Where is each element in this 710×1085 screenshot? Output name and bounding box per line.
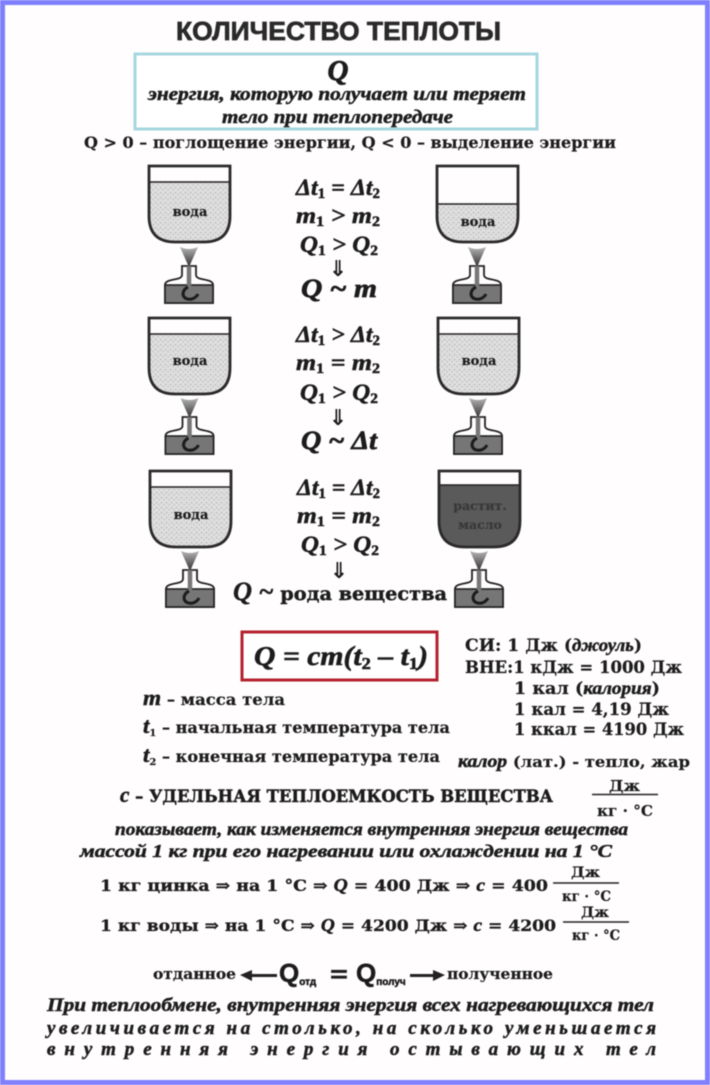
definition box: тело при теплопередаче bbox=[222, 108, 453, 128]
row 2: relations: ⇓ bbox=[329, 406, 347, 431]
units block: 1 кал (калория ) bbox=[514, 678, 660, 698]
variable legend: t bbox=[143, 742, 150, 767]
heat balance equation: отданное bbox=[153, 966, 236, 983]
variable legend: t bbox=[143, 713, 150, 738]
specific heat heading: с – УДЕЛЬНАЯ ТЕПЛОЕМКОСТЬ ВЕЩЕСТВА bbox=[120, 782, 553, 807]
row 1: relations: Q ~ m bbox=[301, 274, 377, 303]
row 2: relations: > Δt bbox=[325, 322, 373, 347]
units block: 1 кал = 4,19 Дж bbox=[514, 700, 669, 719]
row 3: relations bbox=[233, 475, 447, 606]
row 1: relations: = Δt bbox=[325, 175, 373, 200]
specific heat heading: кг · °С bbox=[597, 802, 653, 820]
variable legend: m – масса тела bbox=[143, 685, 285, 710]
row 3: relations: 1 bbox=[317, 514, 325, 530]
row 2: left vessel with lamp bbox=[149, 318, 230, 454]
definition box bbox=[135, 54, 537, 129]
closing statement: внутренняя энергия остывающих тел bbox=[47, 1039, 656, 1060]
main formula box: – t bbox=[371, 641, 411, 671]
variable legend: 1 bbox=[149, 728, 156, 739]
definition box: Q bbox=[328, 55, 349, 87]
zinc example: Дж bbox=[571, 865, 600, 881]
closing statement bbox=[45, 995, 656, 1060]
units block: ВНЕ:1 кДж = 1000 Дж bbox=[465, 658, 682, 677]
main formula box: 2 bbox=[362, 654, 371, 673]
closing statement: При теплообмене, внутренняя энергия всех нагревающихся тел bbox=[46, 995, 654, 1016]
variable legend: – начальная температура тела bbox=[156, 718, 450, 737]
main formula box: ) bbox=[415, 641, 428, 671]
row 1: relations: m bbox=[296, 203, 314, 228]
row 1: right vessel with lamp bbox=[437, 166, 518, 303]
specific heat description: показывает, как изменяется внутренняя энергия вещества bbox=[115, 819, 628, 839]
heat balance equation: полученное bbox=[447, 966, 553, 983]
variable legend: 2 bbox=[149, 757, 156, 768]
row 1: relations bbox=[295, 175, 380, 303]
row 3: relations: 2 bbox=[371, 543, 379, 559]
water example: кг · °С bbox=[572, 928, 620, 944]
row 2: relations: Q bbox=[300, 380, 317, 405]
row 3: relations: > Q bbox=[327, 532, 371, 557]
row 3: relations: = Δt bbox=[326, 475, 373, 500]
row 3: left vessel with lamp bbox=[150, 471, 231, 607]
row 3: right vessel with oil and lamp bbox=[439, 471, 520, 607]
zinc example bbox=[100, 865, 619, 905]
closing statement: увеличивается на столько, на сколько уменьшается bbox=[45, 1018, 656, 1039]
row 2: right vessel with lamp bbox=[438, 318, 519, 454]
row 1: relations: 1 bbox=[316, 214, 324, 230]
units block: 1 ккал = 4190 Дж bbox=[514, 720, 684, 739]
row 3: relations: = m bbox=[325, 503, 372, 528]
row 3: relations: 2 bbox=[372, 514, 380, 530]
row 1: relations: > Q bbox=[326, 232, 370, 257]
main formula box: 1 bbox=[409, 654, 418, 673]
row 2: relations: 1 bbox=[318, 391, 326, 407]
main formula box bbox=[242, 632, 437, 680]
water example: 1 кг воды ⇒ на 1 °С ⇒ Q = 4200 Дж ⇒ с = 4200 bbox=[100, 915, 556, 935]
row 2: relations: 2 bbox=[372, 361, 380, 377]
row 3: relations: m bbox=[297, 503, 315, 528]
title: КОЛИЧЕСТВО ТЕПЛОТЫ bbox=[176, 16, 501, 46]
units block: калор (лат.) - тепло, жар bbox=[458, 751, 690, 771]
row 1: relations: 1 bbox=[318, 243, 326, 259]
row 2: relations: 2 bbox=[370, 391, 378, 407]
specific heat heading: Дж bbox=[609, 777, 640, 795]
row 2: relations: m bbox=[296, 350, 314, 375]
row 3: relations: ⇓ bbox=[330, 559, 348, 584]
heat balance equation: Q bbox=[356, 958, 376, 988]
specific heat description: массой 1 кг при его нагревании или охлаждении на 1 °С bbox=[79, 841, 613, 861]
row 1: right vessel with lamp: вода bbox=[461, 215, 496, 230]
row 3: relations: 1 bbox=[319, 543, 327, 559]
row 1: relations: ⇓ bbox=[329, 257, 347, 282]
zinc example: 1 кг цинка ⇒ на 1 °С ⇒ Q = 400 Дж ⇒ с = 400 bbox=[100, 875, 548, 895]
row 2: right vessel with lamp: вода bbox=[462, 354, 497, 369]
row 1: left vessel with lamp: вода bbox=[173, 205, 208, 220]
row 1: relations: > m bbox=[324, 203, 372, 228]
row 1: left vessel with lamp bbox=[149, 166, 230, 303]
row 1: relations: 2 bbox=[370, 243, 378, 259]
heat balance equation: отд bbox=[299, 977, 317, 988]
row 2: relations: = m bbox=[324, 350, 372, 375]
water example: Дж bbox=[581, 905, 609, 921]
variable legend bbox=[143, 685, 450, 768]
units block bbox=[458, 635, 690, 771]
row 2: left vessel with lamp: вода bbox=[173, 354, 208, 369]
row 1: relations: Δt bbox=[296, 175, 317, 200]
water example bbox=[100, 905, 629, 944]
main formula box: Q = cm(t bbox=[254, 641, 352, 671]
row 1: relations: Q bbox=[300, 232, 317, 257]
row 2: relations: Δt bbox=[296, 322, 317, 347]
row 2: relations: Q ~ Δt bbox=[301, 426, 378, 455]
row 1: relations: 2 bbox=[372, 214, 380, 230]
row 3: left vessel with lamp: вода bbox=[174, 508, 209, 523]
row 1: relations: 2 bbox=[373, 186, 380, 202]
heat balance equation: получ bbox=[376, 977, 406, 988]
row 3: relations: Δt bbox=[297, 475, 318, 500]
row 2: relations: 1 bbox=[318, 333, 325, 349]
row 3: right vessel with oil and lamp: растит. bbox=[453, 498, 507, 513]
row 3: right vessel with oil and lamp: масло bbox=[458, 517, 502, 532]
zinc example: кг · °С bbox=[562, 889, 611, 905]
heat balance equation bbox=[153, 958, 553, 988]
row 2: relations bbox=[295, 322, 380, 455]
row 2: relations: > Q bbox=[326, 380, 370, 405]
row 1: relations: 1 bbox=[318, 186, 325, 202]
heat balance equation: = bbox=[329, 959, 349, 988]
row 3: relations: Q bbox=[301, 532, 318, 557]
sign convention: Q > 0 – поглощение энергии, Q < 0 – выделение энергии bbox=[84, 133, 616, 152]
row 3: relations: Q ~ рода вещества bbox=[233, 577, 447, 606]
row 2: relations: 2 bbox=[373, 333, 380, 349]
specific heat description bbox=[79, 819, 628, 861]
row 3: relations: 1 bbox=[318, 486, 326, 502]
heat balance equation: Q bbox=[279, 958, 299, 988]
definition box: энергия, которую получает или теряет bbox=[147, 85, 526, 105]
units block: СИ: 1 Дж (джоуль) bbox=[465, 635, 642, 655]
variable legend: – конечная температура тела bbox=[156, 747, 440, 766]
row 3: relations: 2 bbox=[373, 486, 380, 502]
row 2: relations: 1 bbox=[316, 361, 324, 377]
specific heat heading bbox=[120, 777, 658, 820]
